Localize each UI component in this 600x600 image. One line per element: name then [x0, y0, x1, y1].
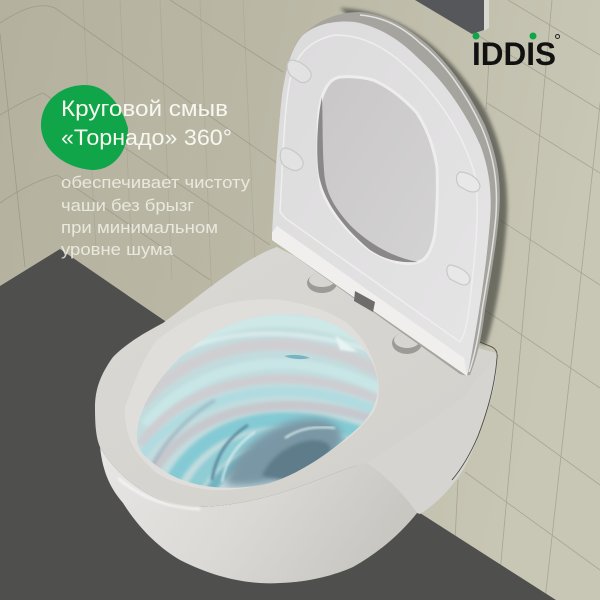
lid front edge: [272, 226, 467, 376]
bumper: top left: [287, 60, 311, 83]
lower bowl: [100, 447, 417, 583]
lid rim: [272, 12, 500, 375]
bumper: lower right: [447, 265, 470, 285]
hole shadow: [317, 97, 418, 262]
heading: «Торнадо» 360°: [61, 125, 232, 150]
lid inner panel edge: [280, 35, 477, 342]
hinge clip: [354, 291, 375, 312]
description text: обеспечивает чистоту: [61, 173, 251, 192]
bowl opening: [125, 299, 379, 490]
description text: при минимальном: [61, 218, 218, 237]
hinges: [307, 273, 422, 354]
top rim surface: [95, 247, 497, 507]
logo: IDDIS: IDDIS: [472, 36, 556, 72]
floor: [0, 249, 556, 600]
description text: [61, 173, 251, 259]
description text: уровне шума: [61, 240, 174, 259]
bumper: middle left: [280, 148, 303, 171]
toilet seat lid: [272, 12, 500, 376]
rim highlight: [118, 478, 200, 509]
water swirl: [137, 314, 378, 488]
lid hole: [318, 77, 437, 264]
vortex: [225, 419, 342, 486]
flush plate: [415, 0, 489, 34]
heading: [61, 96, 232, 150]
lid shadow on wall: [340, 8, 507, 345]
lid rim highlight: [360, 15, 496, 372]
description text: чаши без брызг: [61, 196, 194, 215]
lid inner surface: [272, 22, 491, 376]
bumper: right: [456, 172, 480, 192]
rear wall section: [367, 353, 497, 514]
rear outline: [452, 342, 497, 480]
heading: Круговой смыв: [61, 96, 228, 121]
toilet body: [95, 247, 497, 583]
green blob: [41, 85, 128, 170]
